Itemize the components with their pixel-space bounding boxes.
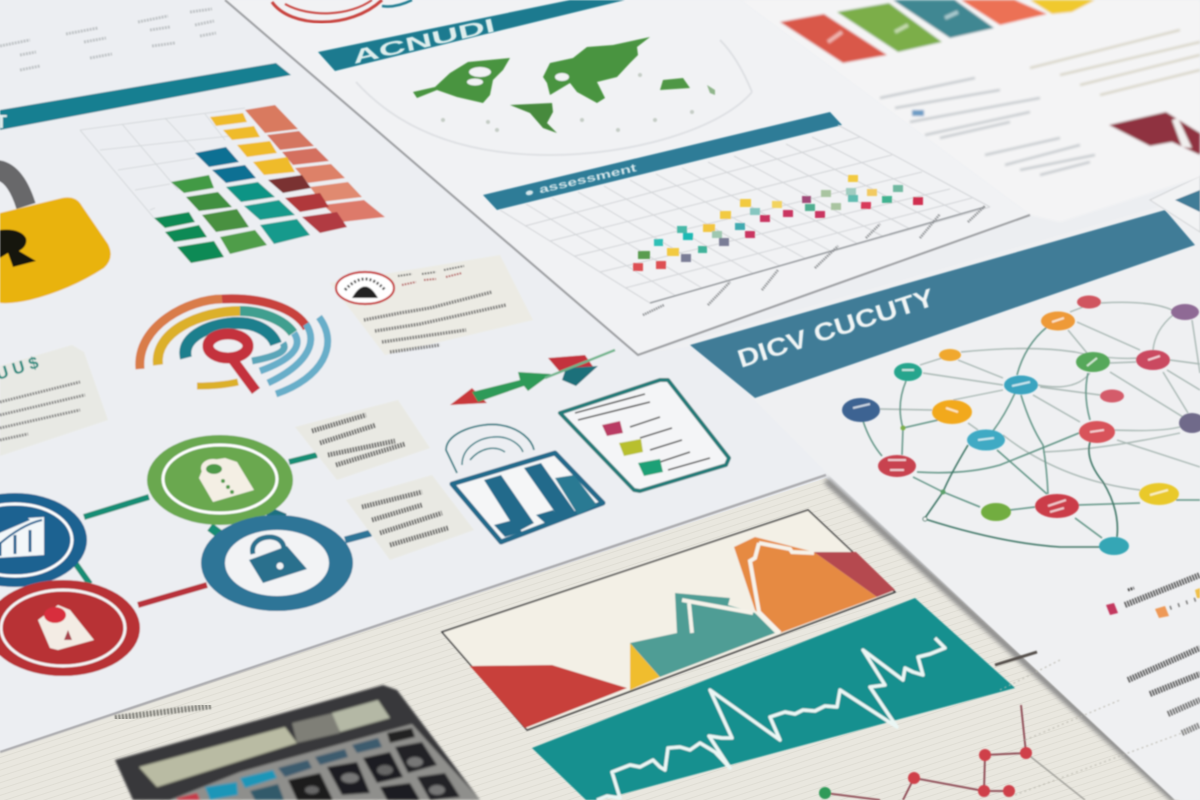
node: blue chart — [0, 493, 87, 587]
icon: checklist document — [560, 380, 729, 491]
note card: upper — [295, 400, 430, 480]
header band — [690, 210, 1195, 398]
teal area — [630, 593, 775, 677]
world map — [356, 37, 752, 155]
calculator keys — [170, 724, 480, 800]
header text: DICV CUCUTY — [734, 284, 938, 374]
node: red lock — [0, 580, 140, 676]
scatter chart band — [483, 112, 842, 210]
icon: arrows — [450, 350, 615, 405]
red area — [470, 665, 627, 728]
line chart bottom right — [819, 652, 1190, 800]
teal ECG banner — [532, 598, 1015, 800]
teal header bar — [0, 63, 291, 130]
icon: rainbow signal — [140, 299, 328, 394]
icon: shield — [1109, 112, 1200, 155]
card: left note — [0, 345, 108, 456]
area chart — [442, 510, 895, 730]
orange peak — [734, 537, 877, 633]
calculator — [115, 685, 480, 800]
panel: upper right sheet — [740, 0, 1200, 222]
note card: lower — [346, 475, 474, 560]
legend and text marks — [1106, 575, 1200, 733]
panel: desk sheet lower — [0, 475, 1180, 800]
scatter chart — [500, 125, 990, 315]
card: gauge note — [330, 255, 533, 355]
header band — [318, 0, 625, 71]
icon: yellow padlock — [0, 170, 111, 303]
icon: dome and bar chart — [446, 424, 603, 542]
node: teal lock — [201, 515, 353, 611]
node: green lock — [147, 435, 293, 525]
panel: small far-right sheet — [1150, 176, 1200, 232]
heatmap grid — [80, 105, 385, 263]
panel: world map and chart sheet — [225, 0, 1030, 355]
icon: top arcs — [272, 0, 412, 22]
icon: gauge — [336, 272, 394, 304]
network graph — [842, 296, 1200, 555]
ribbon blocks — [780, 0, 1095, 63]
header text: ACNUDI — [350, 16, 497, 69]
top-left table marks — [0, 9, 216, 70]
connector lines — [30, 455, 371, 605]
yellow area — [630, 643, 660, 690]
calculator display — [139, 727, 297, 787]
text block marks — [880, 30, 1200, 175]
smudged print note — [115, 706, 212, 718]
chart band text: ● assessment — [523, 162, 638, 200]
maroon slope — [814, 552, 895, 597]
panel: icons sheet — [0, 0, 826, 750]
panel: diversity network sheet — [650, 195, 1200, 800]
